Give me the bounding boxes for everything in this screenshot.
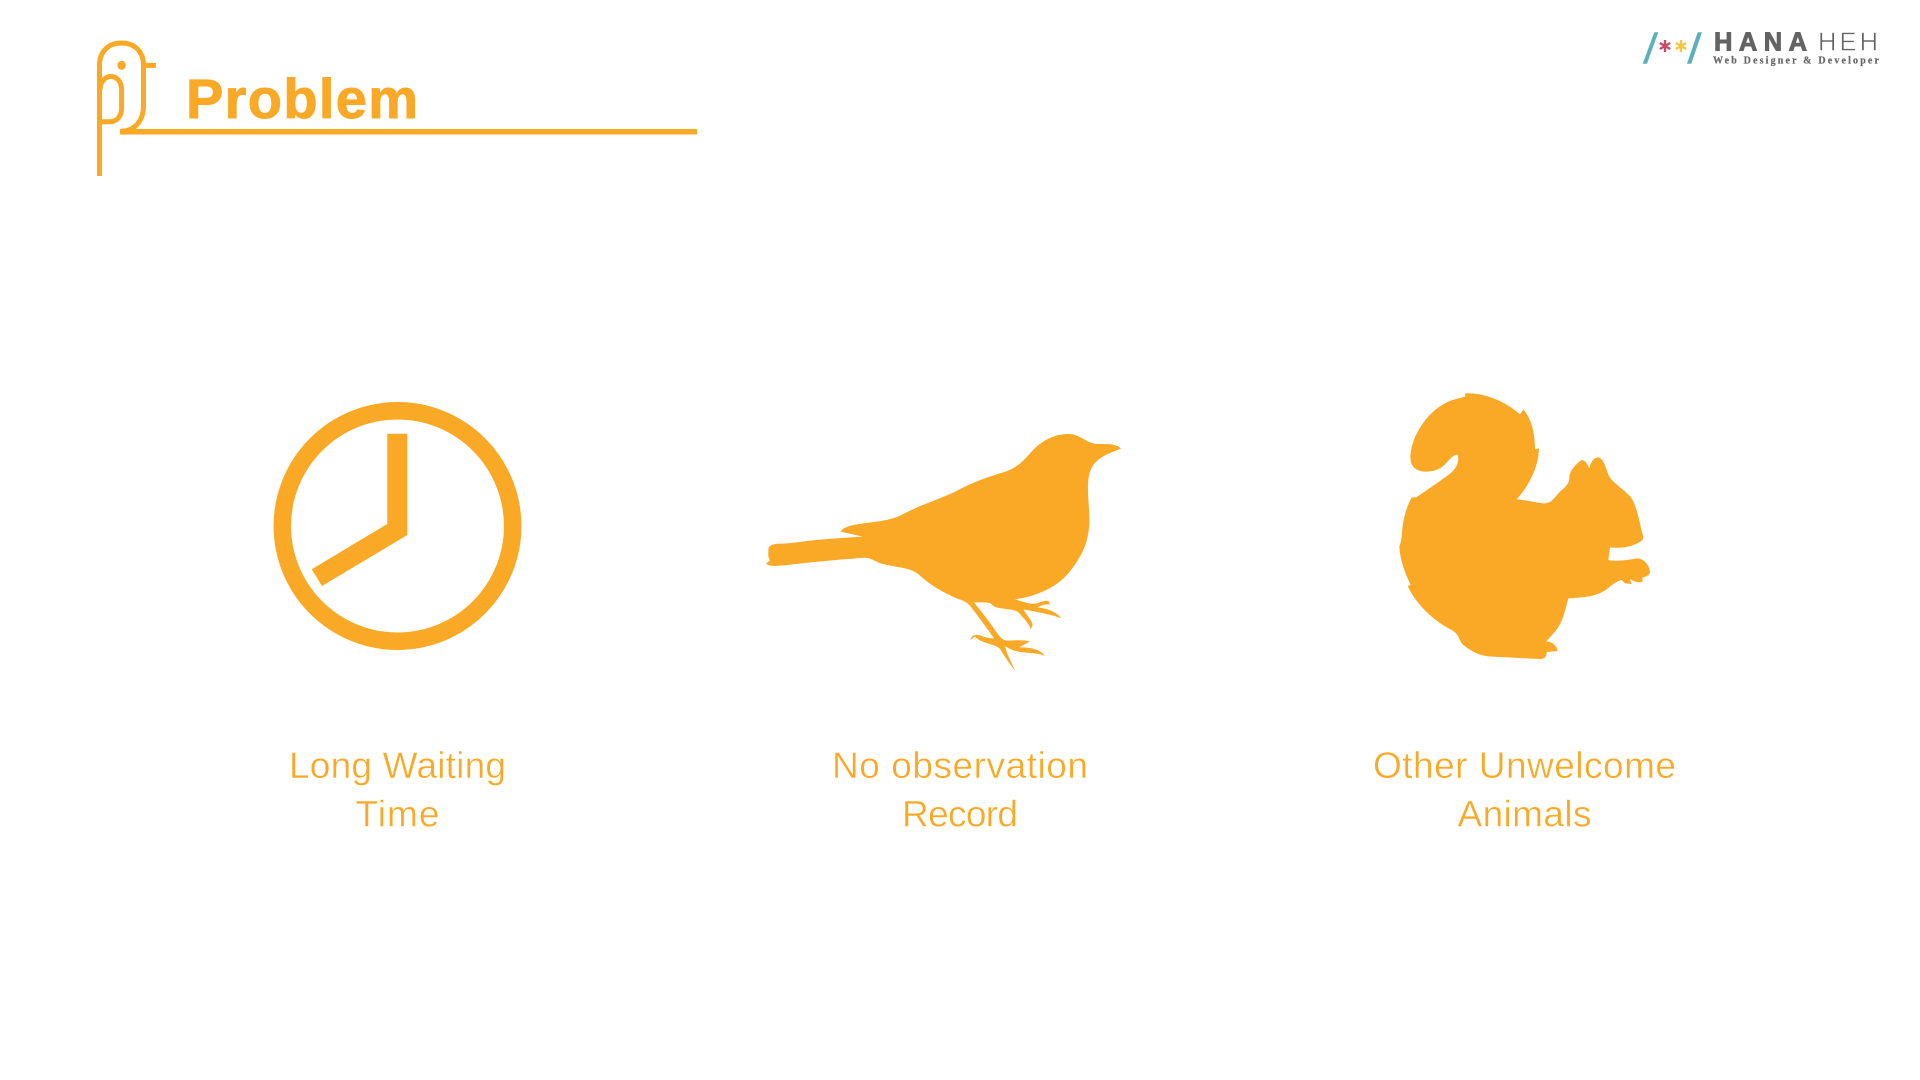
title: Problem xyxy=(186,67,418,130)
label: other unwelcome animals: Other Unwelcome xyxy=(1373,745,1676,786)
label: long waiting time: Time xyxy=(356,794,440,835)
icon: bird silhouette xyxy=(766,434,1121,671)
label: other unwelcome animals: Animals xyxy=(1458,794,1592,835)
logo tagline: Web Designer & Developer xyxy=(1713,55,1880,66)
logo mark: slashes and asterisks xyxy=(1643,32,1702,64)
panel: other unwelcome animals xyxy=(1373,393,1676,835)
title underline xyxy=(120,129,697,134)
icon: squirrel silhouette xyxy=(1399,393,1650,659)
icon: clock xyxy=(282,411,513,641)
logo wordmark: HANA xyxy=(1714,29,1807,57)
panel: no observation record xyxy=(766,434,1121,835)
icon: line-art bird xyxy=(100,43,156,176)
logo wordmark light: HEH xyxy=(1818,29,1878,57)
label: long waiting time: Long Waiting xyxy=(289,745,506,786)
panel: long waiting time xyxy=(282,411,513,835)
label: no observation record: No observation xyxy=(832,745,1088,786)
label: no observation record: Record xyxy=(902,794,1018,835)
header: bird line icon and title xyxy=(100,43,697,176)
logo: Hana Heh xyxy=(1643,29,1880,66)
